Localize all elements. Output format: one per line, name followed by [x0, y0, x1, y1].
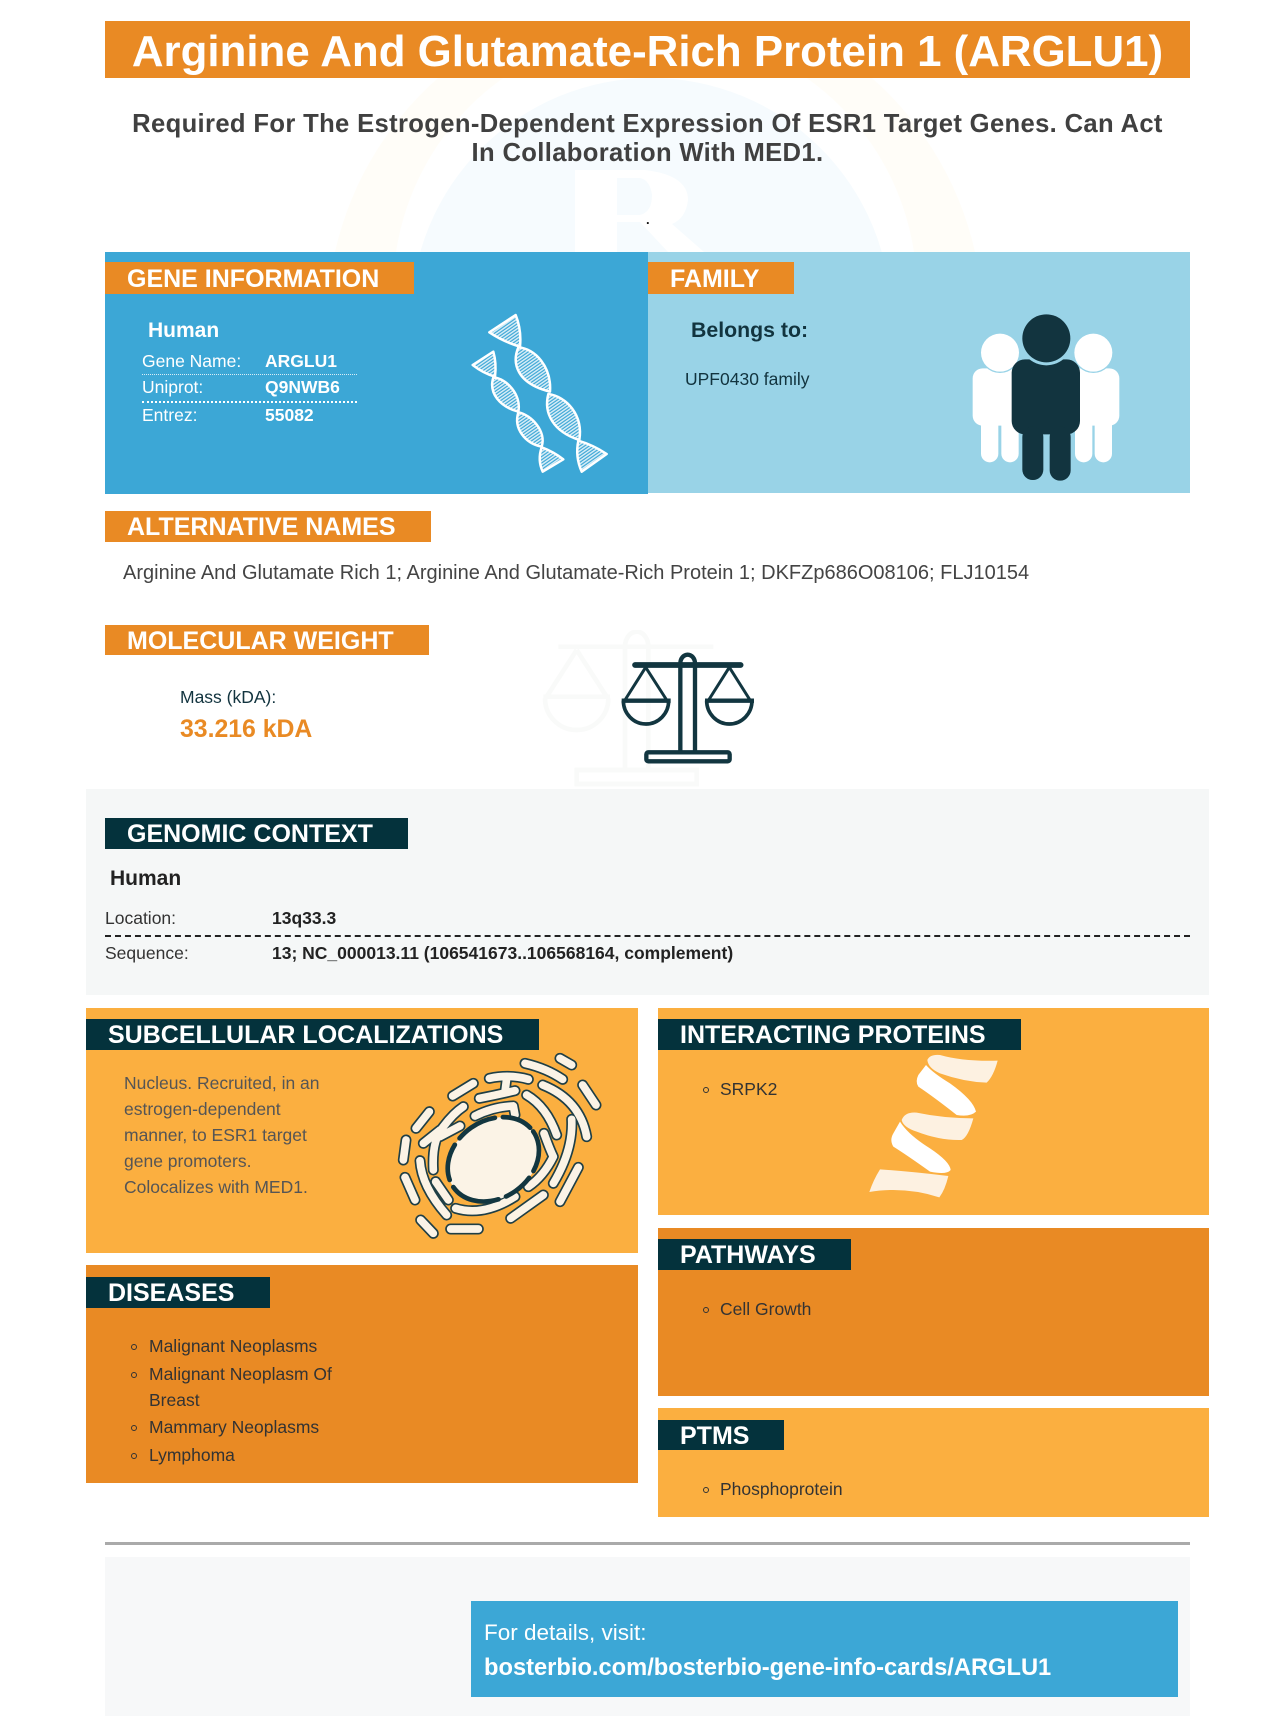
localization text: estrogen-dependent	[124, 1099, 281, 1119]
sequence value: 13; NC_000013.11 (106541673..106568164, complement)	[272, 943, 733, 963]
disease list: Mammary Neoplasms	[149, 1417, 319, 1437]
panel: pathways	[658, 1228, 1209, 1396]
panel: alternative names	[105, 511, 1029, 584]
alternative names text: Arginine And Glutamate Rich 1; Arginine And Glutamate-Rich Protein 1; DKFZp686O08106; FLJ10154	[123, 562, 1029, 584]
callout URL: bosterbio.com/bosterbio-gene-info-cards/ARGLU1	[484, 1655, 1051, 1681]
icon: protein helix ribbon	[869, 1054, 998, 1198]
uniprot row: Uniprot:	[142, 377, 203, 397]
small dot: .	[646, 212, 650, 227]
belongs to label: Belongs to:	[691, 318, 808, 342]
panel: footer	[105, 1557, 1190, 1716]
family name: UPF0430 family	[685, 369, 810, 389]
subtitle	[132, 110, 1163, 167]
icon: balance scale	[622, 652, 754, 764]
localization text: manner, to ESR1 target	[124, 1125, 307, 1145]
localization text: Nucleus. Recruited, in an	[124, 1073, 320, 1093]
mass value: 33.216 kDA	[180, 716, 312, 743]
heading: family	[648, 262, 794, 294]
panel: subcellular localizations	[86, 1008, 638, 1253]
location value: 13q33.3	[272, 908, 336, 928]
disease list: Lymphoma	[149, 1445, 235, 1465]
panel: family	[648, 252, 1190, 493]
subtitle: In Collaboration With MED1.	[472, 139, 823, 167]
heading: genomic context: GENOMIC CONTEXT	[127, 820, 373, 848]
panel: interacting proteins	[658, 1008, 1209, 1215]
localization text	[124, 1073, 320, 1197]
icon: group of people	[972, 314, 1120, 481]
icon: cell with organelles	[398, 1052, 602, 1239]
gene name value: ARGLU1	[265, 351, 337, 371]
uniprot value: Q9NWB6	[265, 377, 340, 397]
heading: subcellular localizations: SUBCELLULAR LOCALIZATIONS	[108, 1021, 503, 1049]
title: Arginine And Glutamate-Rich Protein 1 (ARGLU1)	[132, 27, 1163, 76]
species label: Human	[148, 319, 219, 342]
heading: gene information: GENE INFORMATION	[127, 265, 379, 293]
disease list	[131, 1336, 332, 1465]
mass label: Mass (kDA):	[180, 687, 276, 707]
heading: pathways: PATHWAYS	[680, 1241, 816, 1269]
title banner	[105, 21, 1190, 78]
heading: diseases: DISEASES	[108, 1279, 234, 1307]
panel: genomic context	[86, 789, 1209, 995]
subtitle: Required For The Estrogen-Dependent Expression Of ESR1 Target Genes. Can Act	[132, 110, 1163, 138]
pathway list: Cell Growth	[720, 1299, 811, 1319]
heading: diseases	[86, 1277, 270, 1308]
callout label: For details, visit:	[484, 1620, 647, 1645]
heading: PTMs: PTMS	[680, 1422, 749, 1450]
localization text: Colocalizes with MED1.	[124, 1177, 308, 1197]
heading: family: FAMILY	[670, 265, 759, 293]
disease list: Malignant Neoplasms	[149, 1336, 317, 1356]
heading: alternative names: ALTERNATIVE NAMES	[127, 513, 396, 541]
sequence label: Sequence:	[105, 943, 189, 963]
callout: details link	[471, 1601, 1178, 1697]
panel: PTMs	[658, 1408, 1209, 1517]
localization text: gene promoters.	[124, 1151, 251, 1171]
entrez value: 55082	[265, 405, 314, 425]
PTM list: Phosphoprotein	[720, 1479, 843, 1499]
entrez row: Entrez:	[142, 405, 197, 425]
heading: pathways	[658, 1239, 851, 1270]
heading: PTMs	[658, 1420, 784, 1450]
icon: DNA helices	[471, 314, 608, 473]
disease list: Malignant Neoplasm Of	[149, 1364, 332, 1384]
protein list: SRPK2	[720, 1079, 777, 1099]
location label: Location:	[105, 908, 176, 928]
disease list: Breast	[149, 1390, 200, 1410]
panel: gene information	[105, 252, 648, 494]
watermark scale	[530, 630, 770, 789]
heading: molecular weight: MOLECULAR WEIGHT	[127, 627, 394, 655]
heading: interacting proteins: INTERACTING PROTEINS	[680, 1021, 986, 1049]
panel: diseases	[86, 1265, 638, 1483]
species label: Human	[110, 867, 181, 890]
panel: molecular weight	[105, 625, 754, 764]
gene name row: Gene Name:	[142, 351, 241, 371]
background watermark logo	[420, 78, 882, 252]
